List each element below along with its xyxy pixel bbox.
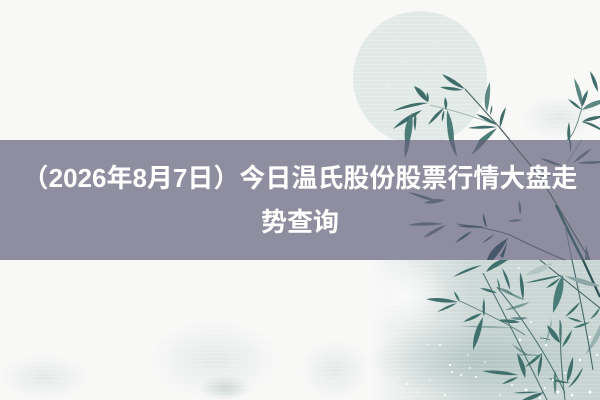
title: （2026年8月7日）今日温氏股份股票行情大盘走 (23, 163, 577, 193)
snow speckles (387, 39, 598, 399)
title: 势查询 (261, 207, 339, 237)
title band (0, 140, 600, 260)
bamboo upper branches (393, 71, 600, 177)
title (23, 163, 577, 237)
bamboo lower branches (426, 260, 600, 400)
bamboo branches seen through the band (404, 128, 600, 260)
mist washes (0, 95, 600, 400)
moon (353, 11, 487, 145)
